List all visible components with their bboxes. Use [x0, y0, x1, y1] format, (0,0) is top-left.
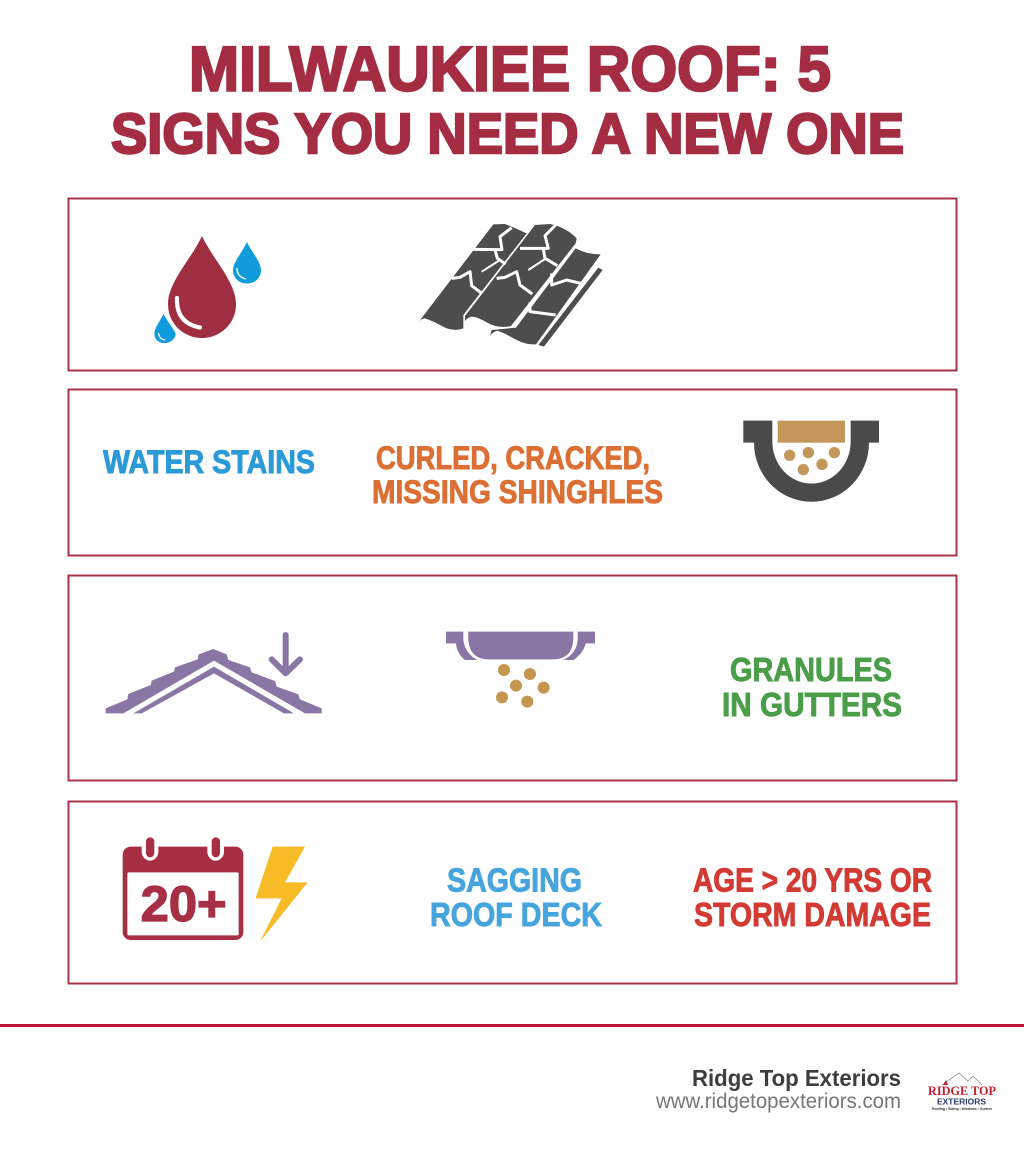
panel: row 2: [68, 390, 956, 556]
label: curled, cracked, missing shingles: CURLED, CRACKED,: [376, 440, 650, 476]
label: sagging roof deck: SAGGING: [447, 862, 582, 898]
label: granules in gutters: [722, 651, 902, 723]
logo: Ridge Top Exteriors: EXTERIORS: [937, 1098, 987, 1106]
title: SIGNS YOU NEED A NEW ONE: [111, 102, 904, 166]
label: age or storm damage: STORM DAMAGE: [694, 896, 931, 933]
icon: calendar 20+: 20+: [141, 876, 227, 932]
panel: row 1 icons: [68, 198, 956, 370]
icon: calendar 20+: [123, 837, 243, 940]
label: sagging roof deck: [430, 862, 602, 933]
label: age or storm damage: [693, 862, 932, 933]
label: curled, cracked, missing shingles: [372, 440, 663, 510]
title: MILWAUKIEE ROOF: 5: [189, 34, 831, 104]
label: granules in gutters: GRANULES: [730, 651, 892, 688]
icon: cracked shingles: [418, 224, 603, 347]
label: granules in gutters: IN GUTTERS: [722, 686, 902, 723]
icon: gutter with granules: [743, 421, 879, 502]
icon: lightning bolt: [256, 847, 308, 942]
label: sagging roof deck: ROOF DECK: [430, 896, 602, 933]
label: curled, cracked, missing shingles: MISSING SHINGHLES: [372, 474, 663, 510]
label: age or storm damage: AGE > 20 YRS OR: [693, 862, 932, 898]
logo: Ridge Top Exteriors: [928, 1073, 996, 1111]
label: water stains: WATER STAINS: [103, 444, 315, 480]
logo: Ridge Top Exteriors: Roofing • Siding • Windows • Gutters: [932, 1107, 992, 1111]
footer: company name and website: Ridge Top Exteriors: [692, 1065, 901, 1091]
icon: water drops: [154, 236, 261, 344]
footer: company name and website: www.ridgetopexteriors.com: [655, 1090, 901, 1113]
icon: sagging roof with arrow: [106, 635, 322, 713]
title: [111, 34, 904, 166]
footer: company name and website: [655, 1065, 901, 1113]
logo: Ridge Top Exteriors: RIDGE TOP: [928, 1084, 996, 1098]
icon: gutter shedding granules: [446, 632, 595, 708]
panel: row 4: [68, 802, 956, 984]
footer divider: [0, 1024, 1024, 1027]
panel: row 3: [68, 576, 956, 780]
